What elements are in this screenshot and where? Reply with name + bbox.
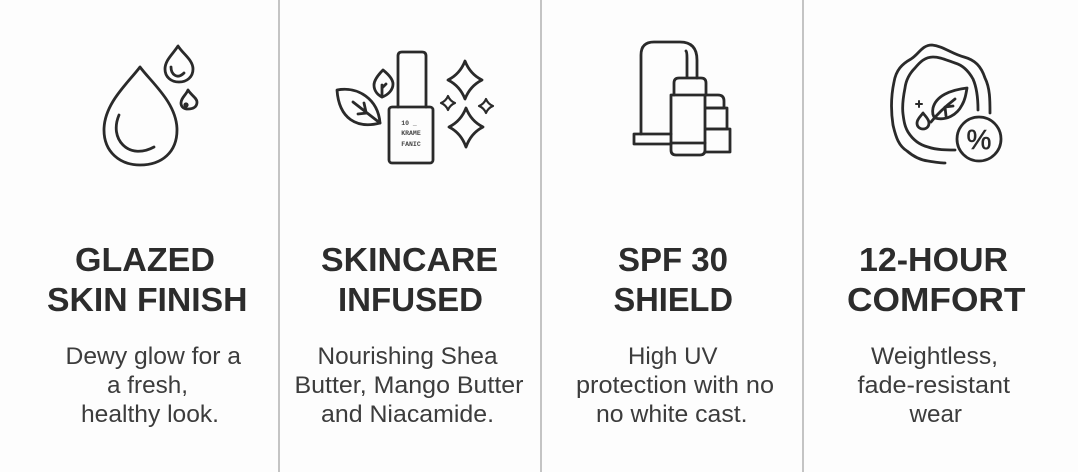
bottle label: KRAME — [401, 130, 421, 137]
heading: 12-hour comfort — [847, 242, 1026, 319]
icon: water drops — [104, 46, 197, 165]
description: glazed skin finish: a fresh, — [107, 372, 188, 399]
bottle label: FANIC — [401, 141, 421, 148]
bottle label — [401, 120, 421, 148]
panel: spf 30 shield — [576, 42, 774, 428]
description: 12-hour comfort: wear — [908, 401, 962, 428]
heading: spf 30 shield: SHIELD — [614, 282, 733, 319]
panel: 12-hour comfort — [847, 45, 1026, 428]
heading: spf 30 shield — [614, 242, 733, 319]
description: skincare infused — [294, 343, 524, 428]
heading: glazed skin finish — [47, 242, 248, 319]
description: spf 30 shield: no white cast. — [596, 401, 748, 428]
heading: spf 30 shield: SPF 30 — [618, 242, 728, 279]
description: 12-hour comfort: Weightless, — [871, 343, 998, 370]
description: glazed skin finish: healthy look. — [81, 401, 219, 428]
heading: 12-hour comfort: COMFORT — [847, 282, 1026, 319]
description: spf 30 shield: protection with no — [576, 372, 774, 399]
bottle label: 10 _ — [401, 120, 417, 127]
heading: glazed skin finish: SKIN FINISH — [47, 282, 248, 319]
icon: skin shield with leaf and percent badge — [892, 45, 1001, 163]
heading: skincare infused: SKINCARE — [321, 242, 498, 279]
description: spf 30 shield: High UV — [628, 343, 718, 370]
heading: glazed skin finish: GLAZED — [75, 242, 215, 279]
panel: skincare infused — [294, 52, 524, 428]
description: spf 30 shield — [576, 343, 774, 428]
percent badge symbol: % — [967, 124, 991, 155]
icon: sunscreen bottles — [634, 42, 730, 155]
description: glazed skin finish: Dewy glow for a — [66, 343, 242, 370]
description: glazed skin finish — [66, 343, 242, 428]
description: skincare infused: Butter, Mango Butter — [294, 372, 524, 399]
description: skincare infused: Nourishing Shea — [318, 343, 498, 370]
heading: skincare infused — [321, 242, 498, 319]
description: 12-hour comfort — [858, 343, 1010, 428]
icon: bottle with leaves and sparkles — [337, 52, 493, 163]
heading: skincare infused: INFUSED — [338, 282, 483, 319]
heading: 12-hour comfort: 12-HOUR — [859, 242, 1008, 279]
panel: glazed skin finish — [47, 46, 248, 428]
description: skincare infused: and Niacamide. — [321, 401, 494, 428]
description: 12-hour comfort: fade-resistant — [858, 372, 1010, 399]
